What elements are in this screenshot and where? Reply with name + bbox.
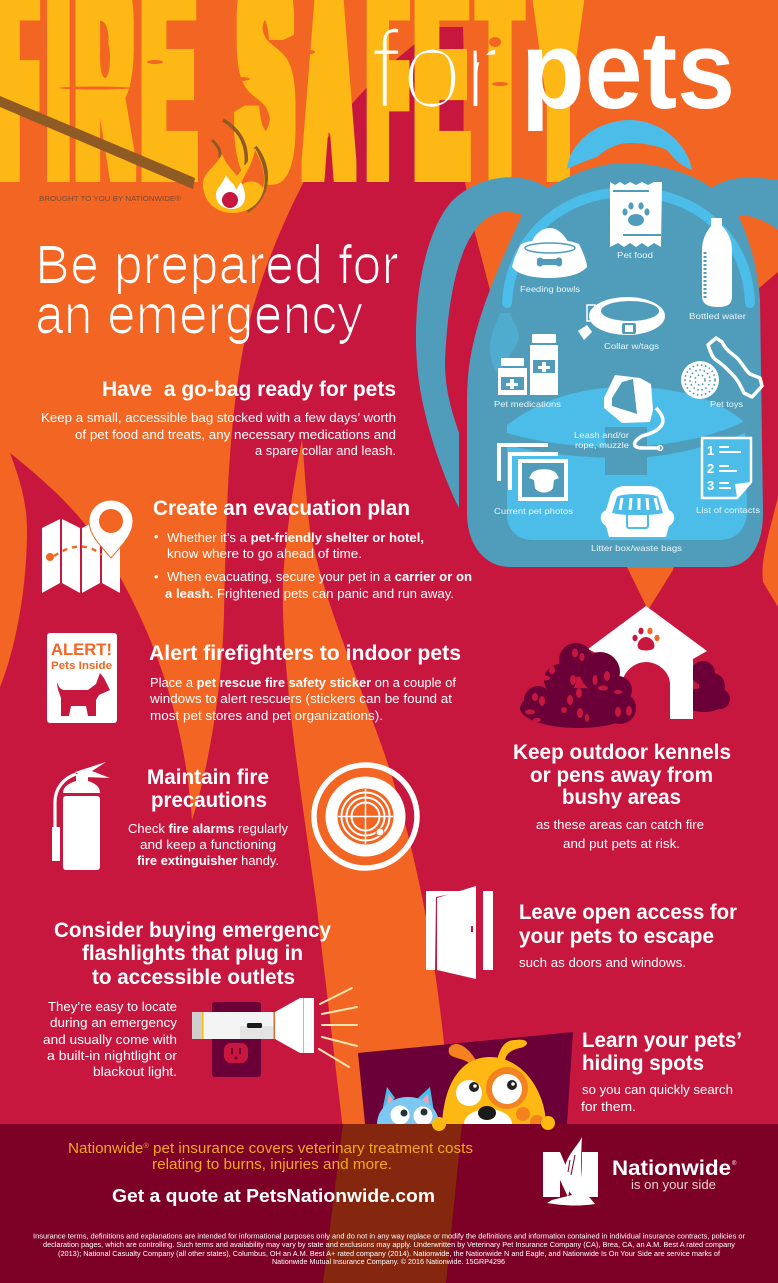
section: flashlights text: and usually come with <box>43 1033 177 1047</box>
section: fire precautions: fire extinguisher handy. <box>137 854 279 868</box>
label: List of contacts <box>696 505 760 515</box>
outlet plate <box>212 1002 261 1077</box>
label: Feeding bowls <box>520 284 580 294</box>
footer copy: pet insurance covers veterinary treatment costs <box>149 1141 473 1157</box>
footer copy: relating to burns, injuries and more. <box>152 1157 392 1173</box>
title: for: for <box>370 7 500 132</box>
label: Pet food <box>617 250 653 260</box>
logo: wordmark: is on your side <box>631 1177 716 1192</box>
match stick <box>0 96 195 189</box>
section: fire precautions: Check fire alarms regularly <box>128 822 289 836</box>
section: flashlights text: during an emergency <box>50 1016 178 1030</box>
footer copy: Nationwide <box>68 1141 140 1157</box>
icon: kennel and bushes <box>520 606 730 728</box>
backpack body and straps <box>416 163 778 567</box>
section: go-bag <box>41 378 396 458</box>
section: evacuation plan: a leash. Frightened pets can panic and run away. <box>165 587 454 601</box>
icon: pets hiding <box>358 1032 573 1151</box>
section: alert firefighters: Alert firefighters to indoor pets <box>149 642 461 665</box>
section: evacuation plan: • <box>154 570 158 584</box>
footer band <box>0 1124 778 1283</box>
section: go-bag: a spare collar and leash. <box>255 444 396 458</box>
section: fire precautions <box>128 766 289 868</box>
icon: smoke alarm <box>314 765 417 868</box>
logo: wordmark <box>612 1157 737 1192</box>
section: evacuation plan <box>153 497 472 601</box>
item: list of contacts: 1 <box>707 443 714 458</box>
footer copy <box>68 1141 473 1206</box>
section: hiding spots <box>581 1029 742 1114</box>
section: fire precautions: and keep a functioning <box>140 838 276 852</box>
backpack <box>416 120 778 567</box>
section: kennels: as these areas can catch fire <box>536 818 704 832</box>
section: kennels <box>513 741 731 851</box>
section: alert firefighters <box>149 642 461 723</box>
title distress marks <box>59 37 508 90</box>
title: pets: pets <box>521 9 735 132</box>
zipper pull <box>490 313 519 375</box>
section: flashlights text: They’re easy to locate <box>48 1000 177 1014</box>
fine print: Nationwide Mutual Insurance Company. © 2016 Nationwide. 15GRP4296 <box>272 1258 505 1266</box>
backpack handle <box>567 120 692 170</box>
label: Pet medications <box>494 399 561 409</box>
title: FIRE SAFETY <box>1 0 580 233</box>
section: evacuation plan: know where to go ahead of time. <box>167 547 362 561</box>
heading: be prepared: an emergency <box>35 285 363 345</box>
section: open access: such as doors and windows. <box>519 956 686 970</box>
section: fire precautions: Maintain fire <box>147 766 269 789</box>
icon: alert sign: ALERT! <box>51 640 112 659</box>
section: hiding spots: hiding spots <box>582 1052 704 1075</box>
logo: wordmark: ® <box>732 1160 737 1167</box>
logo: wordmark: Nationwide <box>612 1157 731 1180</box>
section: open access: Leave open access for <box>519 901 737 924</box>
section: flashlights heading: to accessible outlets <box>92 966 295 989</box>
footer copy: ® <box>143 1142 150 1150</box>
label: Pet toys <box>710 399 743 409</box>
section: kennels: and put pets at risk. <box>563 837 680 851</box>
item: bottled water <box>702 218 732 307</box>
item: carrier <box>601 486 674 537</box>
icon: fire extinguisher <box>52 762 110 870</box>
brought to you by: BROUGHT TO YOU BY NATIONWIDE® <box>39 194 182 203</box>
footer flame tint <box>323 1124 462 1283</box>
footer copy: Get a quote at PetsNationwide.com <box>112 1185 435 1206</box>
label: Bottled water <box>689 311 746 321</box>
item: leash <box>604 375 663 450</box>
kennel <box>588 606 707 719</box>
section: go-bag: of pet food and treats, any necessary medications and <box>75 428 396 442</box>
left bush <box>520 643 636 728</box>
section: flashlights text: blackout light. <box>93 1065 177 1079</box>
label: Leash and/or <box>574 430 629 440</box>
icon: flame <box>203 120 266 213</box>
section: alert firefighters: Place a pet rescue fire safety sticker on a couple of <box>150 676 457 690</box>
fine print: declaration pages, which are controlling. Such terms and availability may vary by state and exclusions may apply. Underwritten by Veterinary Pet Insurance Company (CA), Brea, CA, an A.M. Best A rated company <box>43 1242 736 1249</box>
logo: Nationwide N and eagle <box>543 1137 598 1206</box>
label: rope, muzzle <box>575 440 629 450</box>
section: kennels: bushy areas <box>562 786 681 809</box>
section: hiding spots: so you can quickly search <box>582 1083 733 1097</box>
section: fire precautions: precautions <box>151 789 267 812</box>
dog and cat paws over footer <box>432 1116 555 1131</box>
section: open access: your pets to escape <box>519 925 714 948</box>
section: alert firefighters: most pet stores and pet organizations). <box>150 709 383 723</box>
section: flashlights heading: flashlights that plug in <box>82 942 303 965</box>
section: evacuation plan: Whether it’s a pet-friendly shelter or hotel, <box>167 531 424 545</box>
backpack zip arc <box>507 192 750 303</box>
fine print <box>33 1234 746 1266</box>
dog <box>442 1040 546 1139</box>
pocket band <box>507 421 745 458</box>
cat <box>377 1087 439 1151</box>
item: pet food <box>610 182 662 247</box>
icon: flashlight in outlet <box>192 988 357 1077</box>
item: feeding bowl <box>512 228 587 278</box>
section: evacuation plan: Create an evacuation plan <box>153 497 410 520</box>
item: list of contacts <box>702 438 751 498</box>
fine print: Insurance terms, definitions and explanations are intended for informational purposes only and do not in any way replace or modify the definitions and information contained in individual insurance contracts, policies or <box>33 1234 746 1240</box>
section: flashlights heading <box>54 919 331 989</box>
section: go-bag: Have a go-bag ready for pets <box>102 378 396 401</box>
section: flashlights text: a built-in nightlight or <box>47 1049 177 1063</box>
section: flashlights text <box>43 1000 178 1079</box>
section: hiding spots: Learn your pets’ <box>582 1029 742 1052</box>
section: kennels: or pens away from <box>530 764 713 787</box>
heading: be prepared: Be prepared for <box>35 235 399 295</box>
rays <box>319 988 357 1067</box>
item: list of contacts: 3 <box>707 478 714 493</box>
item: medications <box>498 334 558 395</box>
section: alert firefighters: windows to alert rescuers (stickers can be found at <box>149 692 453 706</box>
item: pet toys <box>681 338 762 399</box>
icon: door <box>426 886 493 979</box>
right bush <box>682 661 730 712</box>
section: flashlights heading: Consider buying emergency <box>54 919 331 942</box>
fine print: (2013); National Casualty Company (all other states), Columbus, OH an A.M. Best A+ rated company (2014). Nationwide, the Nationwide N and Eagle, and Nationwide Is On Your Side are service marks of <box>58 1251 720 1258</box>
section: kennels: Keep outdoor kennels <box>513 741 731 764</box>
section: evacuation plan: • <box>154 530 158 544</box>
icon: alert sign <box>47 633 117 723</box>
label: Collar w/tags <box>604 341 659 351</box>
section: go-bag: Keep a small, accessible bag stocked with a few days’ worth <box>41 411 396 425</box>
heading: be prepared <box>35 235 399 345</box>
label: Litter box/waste bags <box>591 543 682 553</box>
paw <box>632 628 660 650</box>
icon: map with pin <box>42 500 133 593</box>
pocket tab <box>605 427 647 475</box>
icon: alert sign: Pets Inside <box>51 660 112 672</box>
section: evacuation plan: When evacuating, secure your pet in a carrier or on <box>167 570 472 584</box>
item: collar <box>578 297 665 340</box>
item: list of contacts: 2 <box>707 461 714 476</box>
flashlight <box>192 1012 274 1039</box>
section: open access <box>519 901 737 970</box>
section: hiding spots: for them. <box>581 1100 636 1114</box>
backpack pocket <box>507 387 747 540</box>
item: photos <box>497 443 566 499</box>
label: Current pet photos <box>494 506 573 516</box>
